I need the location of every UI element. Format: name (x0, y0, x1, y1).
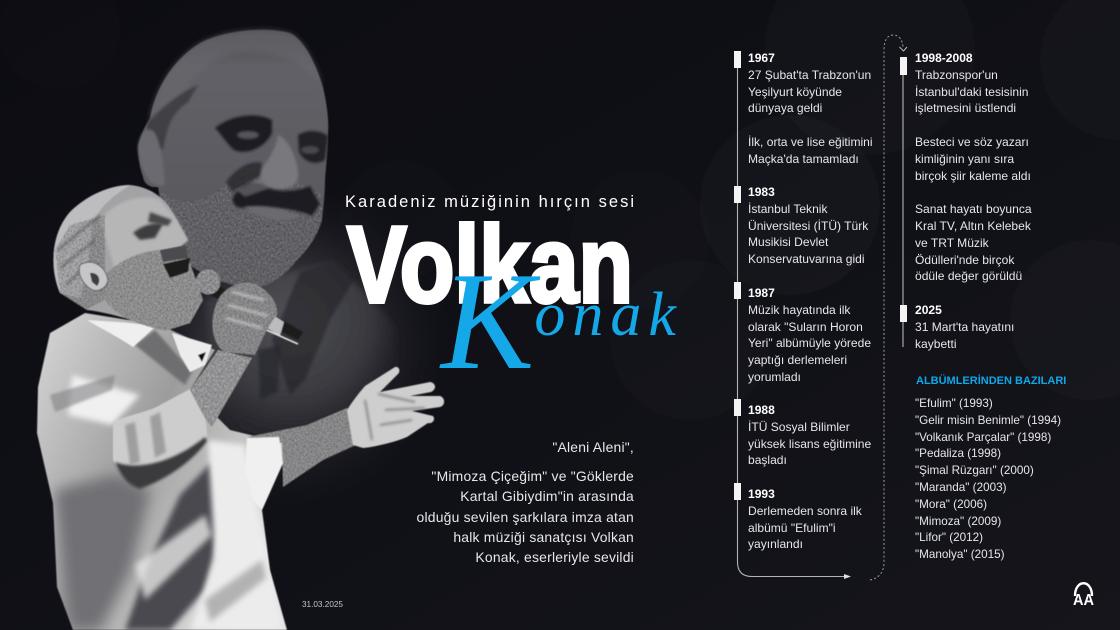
entry 1998-2008: ve TRT Müzik (915, 236, 989, 250)
entry 1987 (748, 286, 871, 384)
entry 1983: İstanbul Teknik (748, 202, 827, 216)
entry 1993: Derlemeden sonra ilk (748, 504, 862, 518)
entry 2025: kaybetti (915, 337, 957, 351)
extended arm (247, 408, 356, 487)
entry 1998-2008: Sanat hayatı boyunca (915, 202, 1032, 216)
albums list: "Volkanık Parçalar" (1998) (915, 431, 1051, 444)
entry 1998-2008: kimliğinin yanı sıra (915, 152, 1014, 166)
quote paragraph: halk müziği sanatçısı Volkan (453, 529, 634, 545)
shirt strap (135, 330, 192, 385)
entry 1983: Musikisi Devlet (748, 235, 828, 249)
entry 1983: 1983 (748, 185, 775, 199)
entry 1967: İlk, orta ve lise eğitimini (748, 135, 873, 149)
quote paragraph: "Mimoza Çiçeğim" ve "Göklerde (431, 468, 634, 484)
portrait beard (160, 172, 322, 288)
albums list: "Pedaliza (1998) (915, 447, 1001, 460)
entry 1998-2008 (915, 51, 1032, 283)
entry 1987: Yeri" albümüyle yörede (748, 336, 871, 350)
portrait body (205, 262, 405, 440)
timeline left (734, 51, 851, 579)
collar (87, 320, 155, 347)
entry 1967: 1967 (748, 51, 775, 65)
entry 1998-2008: ödüle değer görüldü (915, 269, 1022, 283)
entry 1967: Yeşilyurt köyünde (748, 85, 842, 99)
entry 1988: başladı (748, 453, 787, 467)
albums heading: ALBÜMLERİNDEN BAZILARI (916, 375, 1066, 387)
albums list: "Efulim" (1993) (915, 397, 993, 410)
entry 1967: dünyaya geldi (748, 101, 822, 115)
title: Konak: onak (534, 281, 683, 349)
subtitle: Karadeniz müziğinin hırçın sesi (345, 193, 634, 211)
shirt shadows (50, 375, 282, 630)
entry 2025: 2025 (915, 303, 942, 317)
rolled sleeve (113, 387, 207, 488)
entry 1998-2008: birçok şiir kaleme aldı (915, 169, 1031, 183)
microphone (205, 283, 303, 340)
timeline right (900, 57, 907, 347)
connector arrow (900, 47, 907, 51)
albums list: "Maranda" (2003) (915, 481, 1006, 494)
entry 2025 (915, 303, 1014, 351)
quote paragraph: "Aleni Aleni", (552, 439, 634, 455)
entry 2025: 31 Mart'ta hayatını (915, 320, 1014, 334)
entry 1987: olarak "Suların Horon (748, 320, 863, 334)
entry 1988 (748, 403, 871, 467)
singer beard (105, 250, 203, 331)
portrait ear (138, 130, 165, 186)
large faded portrait (138, 30, 405, 440)
singer head (53, 185, 203, 331)
entry 1987: Müzik hayatında ilk (748, 303, 850, 317)
albums list: "Şimal Rüzgarı" (2000) (915, 464, 1034, 477)
quote paragraph: olduğu sevilen şarkılara imza atan (416, 509, 634, 525)
entry 1967: 27 Şubat'ta Trabzon'un (748, 68, 871, 82)
portrait cheek shadow (226, 162, 262, 192)
entry 1998-2008: 1998-2008 (915, 51, 973, 65)
markers (734, 51, 741, 500)
albums list: "Gelir misin Benimle" (1994) (915, 414, 1061, 427)
entry 1998-2008: Trabzonspor'un (915, 68, 998, 82)
title: Konak: K (441, 244, 534, 399)
albums list (915, 397, 1061, 561)
dotted connector (870, 35, 903, 580)
entry 1998-2008: Besteci ve söz yazarı (915, 135, 1029, 149)
entry 1993: yayınlandı (748, 537, 803, 551)
portrait head (138, 30, 328, 288)
quote paragraph: Kartal Gibiydim"in arasında (460, 488, 634, 504)
albums list: "Manolya" (2015) (915, 548, 1005, 561)
arrow right (844, 574, 851, 579)
entry 1998-2008: işletmesini üstlendi (915, 101, 1016, 115)
quote paragraph: Konak, eserleriyle sevildi (475, 549, 634, 565)
shirt body (37, 313, 287, 630)
AA logo (1073, 583, 1094, 609)
entry 1998-2008: İstanbul'daki tesisinin (915, 85, 1028, 99)
quote paragraph (416, 439, 634, 565)
raised forearm (190, 350, 252, 427)
entry 1967: Maçka'da tamamladı (748, 152, 859, 166)
entry 1988: 1988 (748, 403, 775, 417)
entry 1993: 1993 (748, 487, 775, 501)
entry 1988: yüksek lisans eğitimine (748, 437, 871, 451)
portrait brows and eyes (215, 115, 272, 152)
singer hair (53, 185, 130, 298)
hand on microphone (212, 283, 277, 355)
singer ear (79, 262, 108, 291)
entry 1993 (748, 487, 862, 551)
portrait hair (150, 30, 323, 138)
singer face detail (100, 197, 188, 270)
entry 1987: 1987 (748, 286, 775, 300)
entry 1967 (748, 51, 873, 166)
entry 1983: Konservatuvarına gidi (748, 252, 865, 266)
albums list: "Mora" (2006) (915, 498, 987, 511)
entry 1987: yorumladı (748, 370, 801, 384)
portrait nose (260, 135, 298, 189)
entry 1983: Üniversitesi (İTÜ) Türk (748, 219, 868, 233)
singer photo cutout (37, 185, 444, 630)
AA logo: AA (1073, 592, 1094, 609)
date: 31.03.2025 (302, 600, 343, 609)
entry 1988: İTÜ Sosyal Bilimler (748, 420, 850, 434)
title: Volkan: Volkan (347, 204, 633, 326)
entry 1993: albümü "Efulim"i (748, 521, 836, 535)
entry 1983 (748, 185, 868, 266)
singer mouth (163, 258, 190, 278)
entry 1987: yaptığı derlemeleri (748, 353, 847, 367)
entry 1998-2008: Ödülleri'nde birçok (915, 253, 1014, 267)
portrait moustache and mouth (233, 183, 320, 216)
albums list: "Lifor" (2012) (915, 531, 983, 544)
entry 1998-2008: Kral TV, Altın Kelebek (915, 219, 1031, 233)
open hand (347, 367, 444, 448)
albums list: "Mimoza" (2009) (915, 515, 1001, 528)
